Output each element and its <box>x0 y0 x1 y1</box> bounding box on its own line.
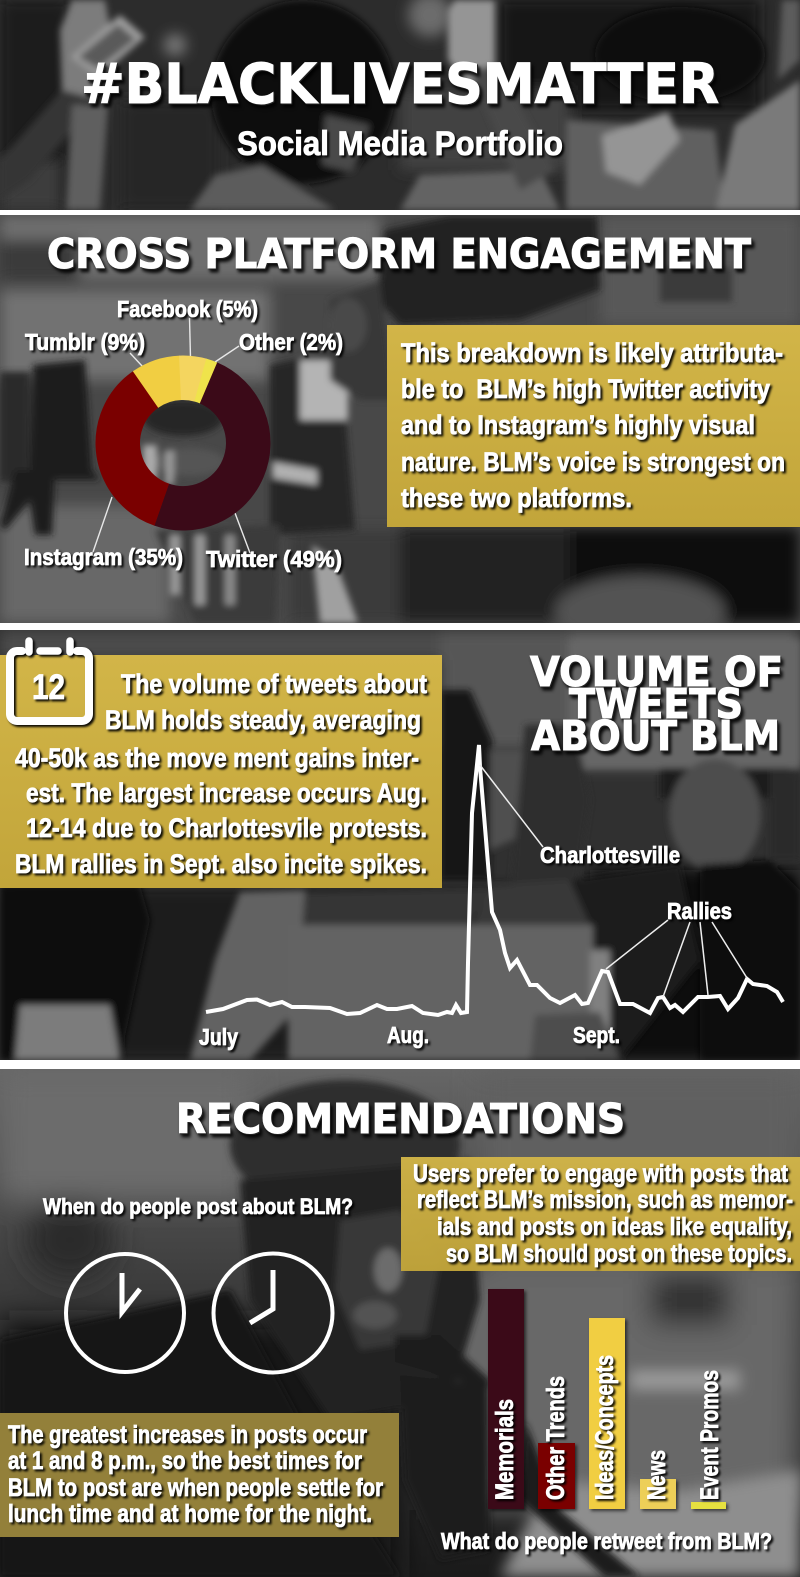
callout: tweet volume text: BLM holds steady, averaging <box>105 705 421 735</box>
callout: best posting times <box>0 1413 399 1537</box>
heading: volume of tweets about BLM: TWEETS <box>569 680 743 728</box>
callout: tweet volume text <box>0 655 442 888</box>
donut chart <box>92 352 274 534</box>
icon: calendar: 12 <box>32 668 65 707</box>
chart labels: Rallies <box>667 898 732 924</box>
heading: volume of tweets about BLM: ABOUT BLM <box>531 712 780 760</box>
callout: best posting times: The greatest increases in posts occur <box>8 1421 367 1449</box>
bar labels: Ideas/Concepts <box>591 1355 619 1500</box>
icon: calendar <box>10 641 89 721</box>
heading: volume of tweets about BLM: VOLUME OF <box>530 648 783 696</box>
callout: tweet volume text: 40-50k as the move ment gains inter- <box>15 743 419 773</box>
callout: what users prefer <box>401 1157 800 1271</box>
callout: breakdown: and to Instagram’s highly visual <box>401 410 755 440</box>
title: #BLACKLIVESMATTER <box>81 52 719 116</box>
chart labels: Charlottesville <box>540 842 680 868</box>
heading: recommendations: RECOMMENDATIONS <box>176 1095 625 1143</box>
callout: best posting times: lunch time and at home for the night. <box>8 1500 372 1528</box>
subheading: when do people post: When do people post about BLM? <box>43 1194 353 1219</box>
icon: clock 1 pm <box>66 1254 184 1372</box>
callout: tweet volume text: 12-14 due to Charlottesvile protests. <box>26 813 427 843</box>
chart labels <box>199 842 732 1050</box>
heading: cross platform engagement: CROSS PLATFORM ENGAGEMENT <box>47 230 751 278</box>
volume photo background <box>0 630 800 1060</box>
donut labels: Instagram (35%) <box>24 544 183 570</box>
subtitle: Social Media Portfolio <box>237 125 563 163</box>
callout: tweet volume text: est. The largest increase occurs Aug. <box>26 778 427 808</box>
bar chart: retweeted content <box>488 1289 726 1509</box>
chart labels: Aug. <box>387 1022 429 1048</box>
bar labels <box>491 1355 724 1500</box>
donut labels: Tumblr (9%) <box>25 329 145 355</box>
callout: best posting times: BLM to post are when people settle for <box>8 1474 383 1502</box>
callout: breakdown <box>387 325 800 527</box>
header photo background <box>0 0 800 210</box>
bar labels: Event Promos <box>696 1370 724 1500</box>
heading: volume of tweets about BLM <box>530 648 783 760</box>
bar labels: Other Trends <box>542 1376 570 1500</box>
panel: volume of tweets <box>0 630 800 1060</box>
bar labels: News <box>643 1450 671 1500</box>
panel: header <box>0 0 800 210</box>
panel: cross platform engagement <box>0 215 800 648</box>
chart labels: Sept. <box>573 1022 620 1048</box>
chart labels: July <box>199 1024 238 1050</box>
line chart: tweet volume <box>206 745 783 1015</box>
panel: recommendations <box>0 1069 800 1577</box>
donut labels: Facebook (5%) <box>117 296 258 322</box>
icon: clock 8 pm <box>214 1254 332 1372</box>
callout: breakdown: these two platforms. <box>401 483 632 513</box>
callout: tweet volume text: The volume of tweets about <box>121 669 427 699</box>
recommendations photo background <box>0 1069 800 1577</box>
callout: best posting times: at 1 and 8 p.m., so the best times for <box>8 1447 362 1475</box>
leader lines <box>93 318 250 553</box>
donut labels <box>24 296 343 572</box>
donut labels: Other (2%) <box>239 329 343 355</box>
bar labels: Memorials <box>491 1399 519 1500</box>
donut labels: Twitter (49%) <box>206 546 342 572</box>
callout: tweet volume text: BLM rallies in Sept. also incite spikes. <box>15 849 427 879</box>
bars <box>488 1289 726 1509</box>
engagement photo background <box>0 215 800 648</box>
